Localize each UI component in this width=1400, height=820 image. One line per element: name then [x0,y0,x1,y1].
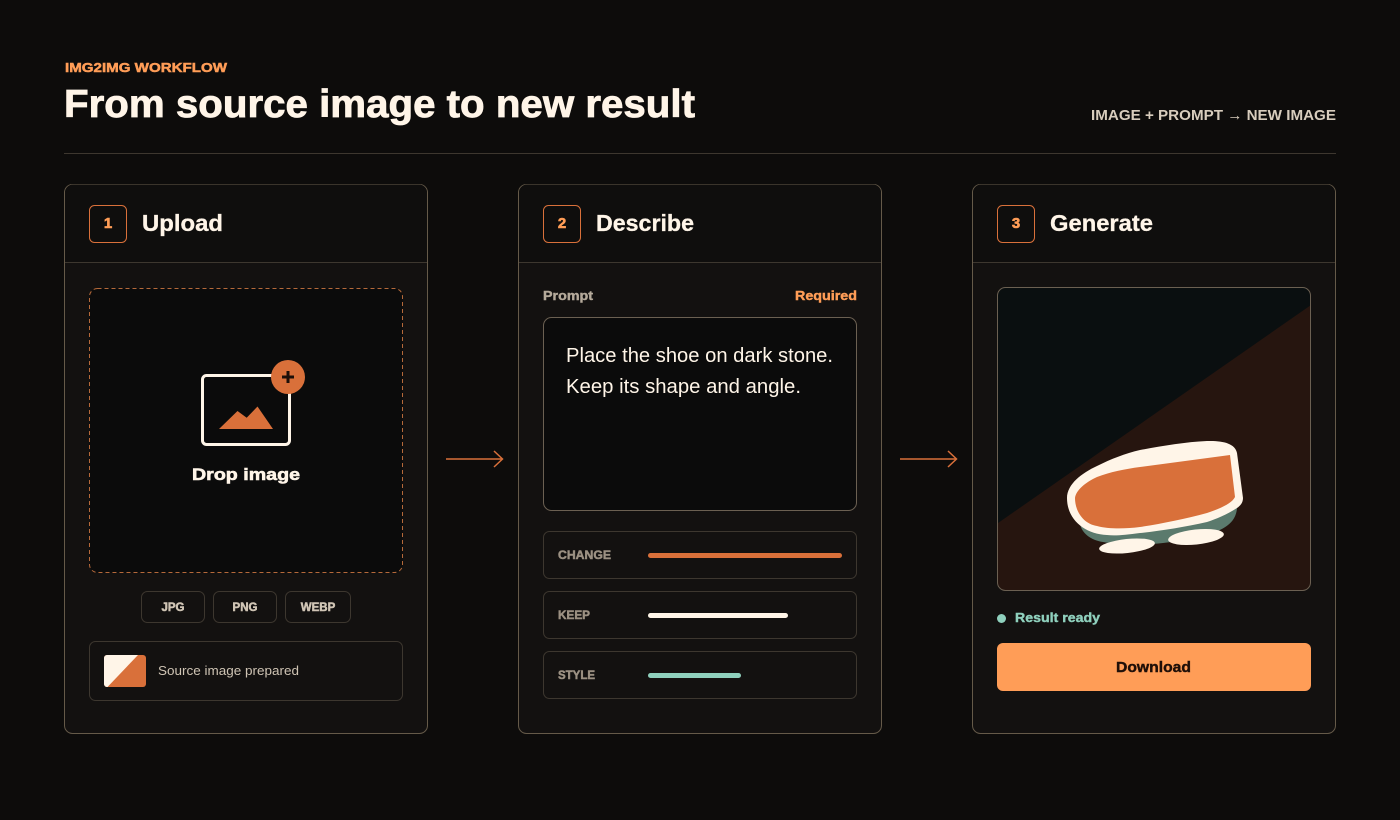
chip: PNG: PNG [233,602,258,614]
icon: image placeholder with plus [202,360,305,444]
slider: keep [544,592,856,638]
step title: upload: Upload [142,210,223,236]
step number 2: 2 [558,215,566,232]
panel: generate [972,184,1336,734]
drop image label: Drop image [192,465,300,484]
required label: Required [795,289,857,303]
format chips [142,592,350,622]
formula caption: IMAGE + PROMPT → NEW IMAGE [1091,107,1336,124]
download button: Download [1116,660,1191,676]
step title: generate: Generate [1050,210,1153,236]
panel: upload [64,184,428,734]
panel header: upload [65,184,427,262]
step number 3 [998,206,1034,242]
chip: PNG [214,592,276,622]
step number 3: 3 [1012,215,1020,232]
drop zone [90,288,402,572]
chip: WEBP [286,592,350,622]
prompt label: Prompt [543,289,594,303]
slider: change: CHANGE [558,548,611,562]
step number 2 [544,206,580,242]
source image status [90,642,402,700]
slider: keep: KEEP [558,608,590,622]
slider: style: STYLE [558,668,595,682]
panel header: describe [519,184,881,262]
chip: JPG [142,592,204,622]
icon: source thumbnail [104,655,146,687]
prompt line 1: Place the shoe on dark stone. [566,345,833,367]
panel header: generate [973,184,1335,262]
illustration: shoe on stone [1067,441,1243,556]
prompt text box [544,318,856,510]
chip: JPG: JPG [161,602,185,614]
eyebrow label: IMG2IMG WORKFLOW [65,60,228,75]
result status: Result ready [1015,610,1101,625]
result image [998,288,1311,590]
title: From source image to new result [64,83,695,126]
arrow: upload to describe [446,451,502,467]
status text: Source image prepared [158,663,299,678]
download button [997,643,1311,691]
chip: WEBP: WEBP [301,602,336,614]
arrow: describe to generate [900,451,956,467]
slider: change [544,532,856,578]
step number 1 [90,206,126,242]
step number 1: 1 [104,215,112,232]
prompt line 2: Keep its shape and angle. [566,376,801,398]
slider: style [544,652,856,698]
step title: describe: Describe [596,210,694,236]
panel: describe [518,184,882,734]
header [64,60,1336,126]
